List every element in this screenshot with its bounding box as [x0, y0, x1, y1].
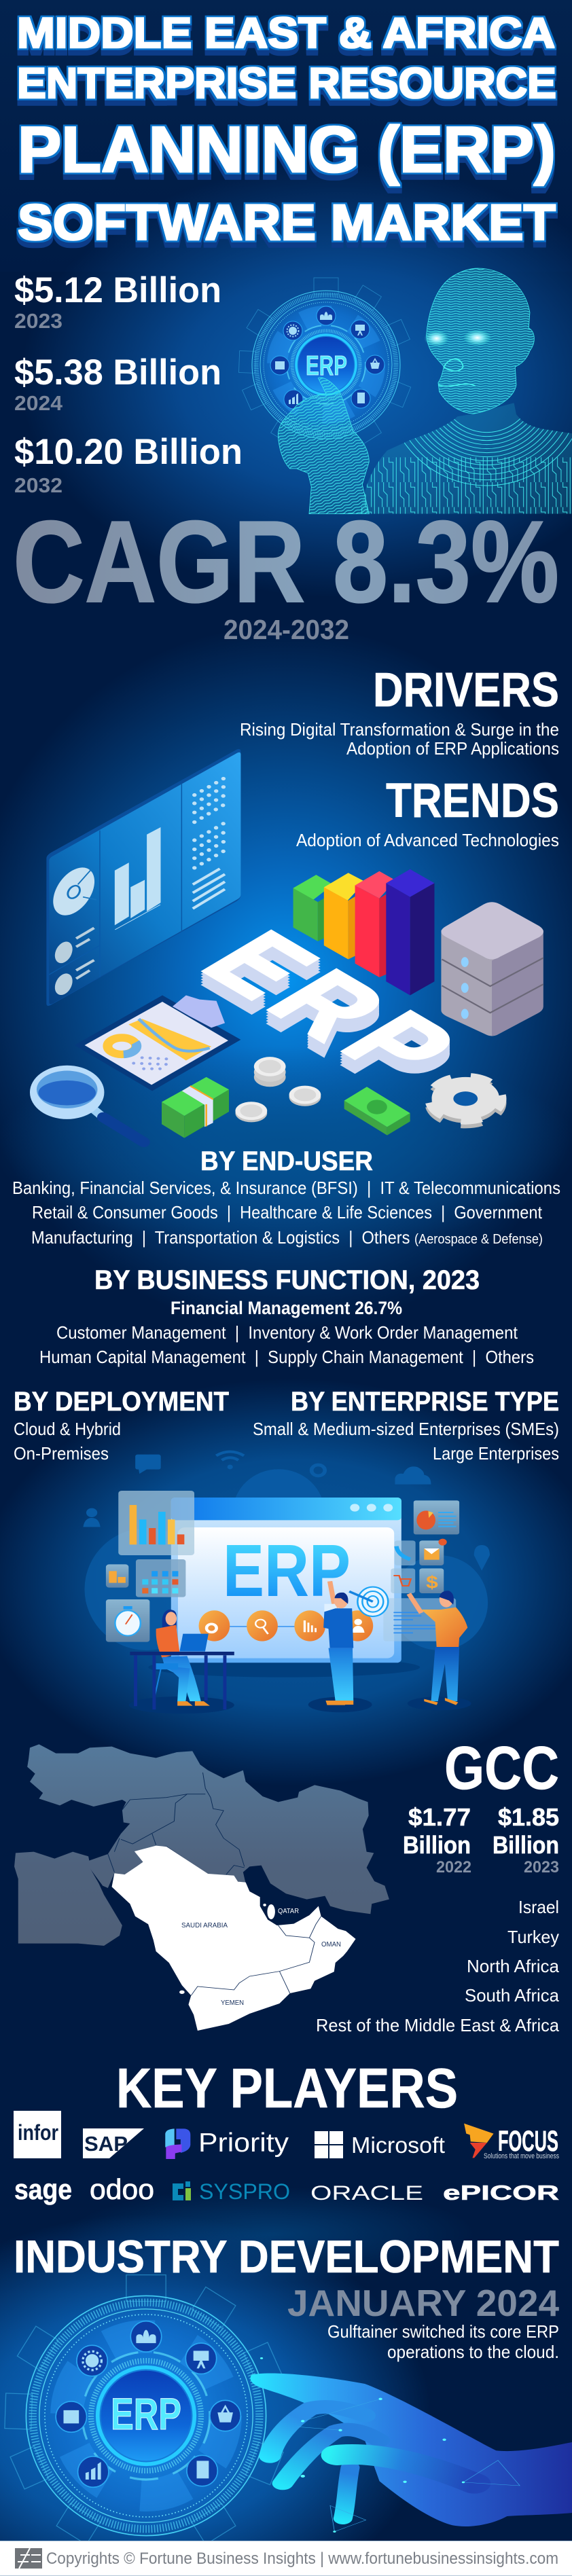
stat 2024: 2024	[14, 391, 63, 415]
robot	[278, 268, 572, 514]
logo: odoo: odoo	[90, 2173, 154, 2205]
trends text: Adoption of Advanced Technologies	[296, 830, 559, 850]
large dial label: ERP	[111, 2389, 181, 2439]
stat 2023: $5.12 Billion	[14, 270, 221, 310]
stat 2024	[14, 352, 221, 415]
drivers text: Adoption of ERP Applications	[346, 738, 559, 759]
end-user list: Manufacturing | Transportation & Logistics | Others (Aerospace & Defense)	[31, 1227, 543, 1248]
GCC 2022 value: 2022	[436, 1858, 471, 1876]
key players heading: KEY PLAYERS	[116, 2056, 458, 2120]
by business function	[39, 1265, 534, 1367]
logo: infor: infor	[18, 2120, 58, 2145]
business function heading: BY BUSINESS FUNCTION, 2023	[94, 1265, 480, 1295]
illustration: ERP dial with reaching hand	[5, 2275, 572, 2545]
by end-user	[12, 1146, 560, 1248]
leading share: Financial Management 26.7%	[171, 1298, 402, 1318]
GCC 2022 value: $1.77	[408, 1803, 471, 1831]
key players	[14, 2056, 559, 2205]
stat 2032	[14, 432, 243, 497]
logo: Microsoft	[315, 2131, 445, 2158]
end-user list	[12, 1178, 560, 1248]
map labels: YEMEN	[221, 1999, 244, 2007]
GCC 2023 value: $1.85	[498, 1803, 559, 1831]
logo: Microsoft: Microsoft	[351, 2133, 445, 2158]
region list	[316, 1897, 560, 2035]
region list: North Africa	[467, 1956, 560, 1976]
stat 2032: $10.20 Billion	[14, 432, 243, 472]
end-user heading: BY END-USER	[200, 1146, 373, 1176]
country borders	[108, 1773, 245, 1874]
map labels: QATAR	[278, 1908, 299, 1915]
business function list: Human Capital Management | Supply Chain Management | Others	[39, 1347, 534, 1367]
logo: infor	[14, 2111, 61, 2158]
logo: SAP: SAP	[84, 2132, 128, 2156]
GCC	[316, 1735, 560, 2035]
isometric server	[441, 902, 543, 1036]
market size stats	[14, 270, 243, 497]
business function list: Customer Management | Inventory & Work Order Management	[56, 1322, 518, 1343]
GCC 2022 value: Billion	[403, 1831, 471, 1859]
stat 2032: 2032	[14, 473, 62, 497]
logo: EPICOR: ePICOR	[443, 2181, 559, 2205]
isometric ERP letters: E	[177, 915, 344, 1014]
enterprise type list	[253, 1419, 559, 1464]
map labels	[181, 1908, 341, 2007]
GCC 2023 value: 2023	[524, 1858, 559, 1876]
isometric ERP letters	[177, 915, 483, 1094]
region map	[14, 1744, 389, 2031]
by deployment	[14, 1387, 229, 1464]
footer	[0, 2541, 572, 2576]
money stack	[162, 1077, 229, 1138]
isometric dashboard panel	[45, 749, 240, 1006]
man in orange	[408, 1591, 471, 1710]
drivers text	[240, 719, 559, 759]
logo: SYSPRO: SYSPRO	[199, 2179, 290, 2204]
title: MIDDLE EAST & AFRICA	[17, 10, 555, 57]
development description: operations to the cloud.	[387, 2342, 559, 2362]
reaching hand	[251, 2357, 572, 2533]
map labels: SAUDI ARABIA	[181, 1922, 228, 1929]
floating chart panels	[106, 1491, 459, 1642]
map labels: OMAN	[321, 1941, 341, 1948]
GCC 2023 value	[493, 1803, 559, 1876]
background cloud and icons	[83, 1452, 490, 1650]
GCC countries	[112, 1846, 356, 2031]
ERP window	[171, 1498, 401, 1663]
logo: sage: sage	[14, 2173, 72, 2205]
robot head	[424, 268, 534, 414]
woman at desk	[129, 1610, 234, 1713]
region list: Rest of the Middle East & Africa	[316, 2015, 560, 2035]
title: SOFTWARE MARKET	[18, 194, 556, 251]
footer logo	[15, 2548, 42, 2569]
dollar bill	[344, 1087, 410, 1136]
logo: FOCUS	[464, 2124, 559, 2160]
isometric ERP letters: R	[242, 954, 414, 1055]
deployment list: On-Premises	[14, 1443, 109, 1464]
development description	[327, 2321, 559, 2362]
window shadow	[148, 1657, 420, 1677]
ERP dial label: ERP	[306, 350, 347, 381]
deployment list: Cloud & Hybrid	[14, 1419, 121, 1439]
robot neck and shoulders	[360, 403, 572, 513]
GCC 2023 value: Billion	[493, 1831, 559, 1859]
title	[17, 10, 556, 251]
robot hand	[278, 378, 369, 514]
illustration: team around ERP window	[83, 1452, 490, 1713]
title: PLANNING (ERP)	[18, 113, 556, 186]
non-GCC countries	[14, 1744, 389, 1946]
business function list	[39, 1322, 534, 1367]
logo: Priority: Priority	[198, 2128, 289, 2158]
enterprise type list: Large Enterprises	[433, 1443, 559, 1464]
ERP window label: ERP	[223, 1529, 351, 1612]
trends	[296, 774, 559, 850]
stat 2023: 2023	[14, 309, 62, 333]
illustration: wireframe robot touching ERP dial	[239, 268, 572, 514]
by enterprise type	[253, 1387, 559, 1464]
industry development	[14, 2231, 559, 2362]
stat 2024: $5.38 Billion	[14, 352, 221, 393]
GCC 2022 value	[403, 1803, 471, 1876]
ERP dial	[239, 278, 411, 444]
region list: Israel	[518, 1897, 559, 1917]
illustration: isometric ERP scene	[30, 749, 543, 1142]
target with arrow	[349, 1587, 388, 1616]
deployment heading: BY DEPLOYMENT	[14, 1387, 229, 1417]
title: ENTERPRISE RESOURCE	[17, 60, 556, 107]
floating chart panels: $	[426, 1573, 438, 1593]
gear	[429, 1076, 502, 1125]
date: JANUARY 2024	[287, 2282, 559, 2324]
stat 2023	[14, 270, 221, 333]
region list: Turkey	[507, 1927, 559, 1947]
isometric ERP letters: P	[316, 996, 483, 1094]
coins	[235, 1057, 321, 1122]
CAGR period: 2024-2032	[224, 614, 349, 645]
magnifying glass	[30, 1066, 144, 1142]
man in blue	[308, 1581, 372, 1712]
isometric bar columns	[293, 869, 434, 996]
region list: South Africa	[465, 1985, 560, 2006]
logo: Priority	[165, 2128, 289, 2159]
logo: ORACLE: ORACLE	[310, 2182, 423, 2205]
clipboard with charts	[75, 996, 240, 1091]
deployment list	[14, 1419, 121, 1464]
logo: SAP	[83, 2128, 144, 2158]
drivers	[240, 664, 559, 759]
large ERP dial	[5, 2275, 283, 2545]
